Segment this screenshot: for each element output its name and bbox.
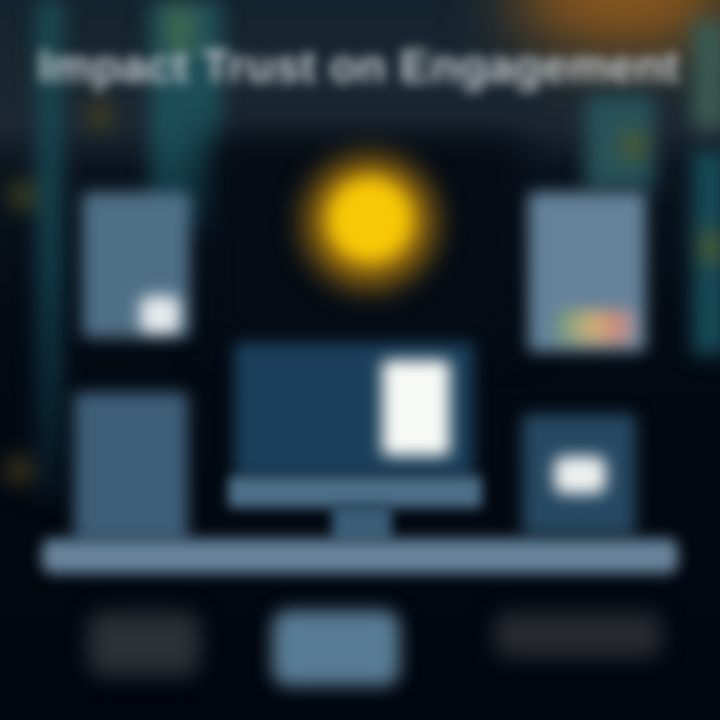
central dark backdrop <box>205 135 525 345</box>
card highlight tile <box>140 296 180 334</box>
background: orange glow top right <box>510 0 720 50</box>
panel: top left card <box>82 192 190 338</box>
panel: lower right card <box>522 414 636 536</box>
icon: glowing yellow sun <box>284 136 456 308</box>
monitor base bar <box>228 476 482 508</box>
panel: top right card <box>528 192 646 352</box>
title: Impact Trust on Engagement <box>38 40 680 92</box>
background: left teal columns <box>0 0 230 492</box>
icon: bottom right grey block <box>494 612 662 658</box>
colored chart strip <box>558 310 636 344</box>
white document on screen <box>382 360 450 456</box>
desk surface <box>42 538 678 574</box>
monitor stand <box>332 505 392 541</box>
monitor screen <box>234 342 474 478</box>
icon: bottom left grey block <box>88 612 200 676</box>
panel: lower left card <box>74 392 188 542</box>
card highlight tile <box>554 456 606 494</box>
background: right teal columns <box>574 12 720 366</box>
icon: bottom center blue block <box>272 610 400 686</box>
